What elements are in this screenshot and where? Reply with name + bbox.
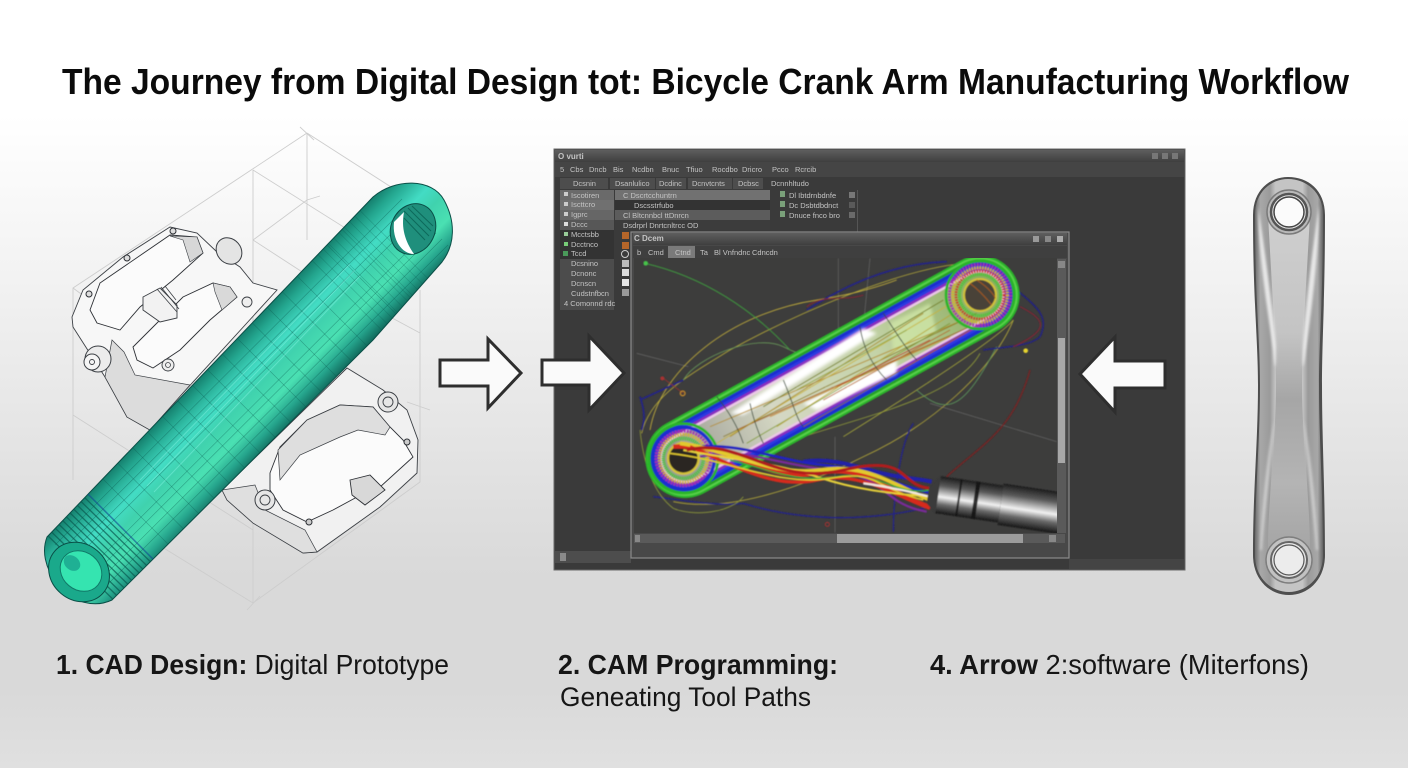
inner title bar: C Dcem — [634, 234, 664, 243]
left tree panel: Dcsnino — [571, 259, 598, 268]
menu bar: Cbs — [570, 165, 584, 174]
left tree panel: Cudstnfbcn — [571, 289, 609, 298]
menu bar: Dncb — [589, 165, 607, 174]
inner horizontal scrollbar — [634, 534, 1065, 543]
twisted toolpath bundle — [670, 443, 932, 512]
left tree panel: Iscttcro — [571, 200, 595, 209]
green crank cylinder mesh — [36, 183, 452, 614]
upper boss rings — [946, 261, 1014, 329]
middle list panel — [615, 190, 770, 296]
middle list panel: C Dscrtcchuntrn — [623, 191, 677, 200]
menu bar: Rcrcib — [795, 165, 816, 174]
inner tabs: Ctnd — [675, 248, 691, 257]
crank edge highlights — [1258, 205, 1319, 550]
left tree panel: Tccd — [571, 249, 586, 258]
caption: step 2 — [558, 649, 838, 712]
title bar — [555, 150, 1184, 162]
menu bar: 5 — [560, 165, 564, 174]
caption: step 1: 1. CAD Design: Digital Prototype — [56, 649, 449, 680]
toolbar tabs: Dcsnin — [573, 179, 596, 188]
inner title bar — [633, 233, 1067, 245]
menu bar: Ncdbn — [632, 165, 654, 174]
left tree panel: Dcnonc — [571, 269, 597, 278]
menu bar: Rocdbo — [712, 165, 738, 174]
arrow: CAD to CAM — [440, 339, 521, 408]
outer status bar — [555, 551, 1184, 569]
menu bar: Pcco — [772, 165, 789, 174]
toolbar tabs: Dcbsc — [738, 179, 759, 188]
menu bar — [555, 162, 1184, 177]
menu bar: Dricro — [742, 165, 762, 174]
right options panel: Dc Dsbtdbdnct — [789, 201, 839, 210]
inner tabs: b — [637, 248, 641, 257]
toolpath drawing — [637, 258, 1080, 536]
caption: step 4: 4. Arrow 2:software (Miterfons) — [930, 649, 1309, 680]
toolpath canvas background — [634, 258, 1057, 533]
toolbar tabs: Dcnvtcnts — [692, 179, 725, 188]
inner tabs: Cmd — [648, 248, 664, 257]
title bar: O vurti — [558, 152, 584, 161]
panel: finished crank arm — [1253, 177, 1325, 595]
cutting tool — [926, 476, 1057, 533]
inner toolpath strands — [710, 300, 977, 443]
inner vertical scrollbar — [1057, 259, 1066, 533]
left tree panel: Igprc — [571, 210, 588, 219]
right options panel: Dnuce fnco bro — [789, 211, 840, 220]
crank highlight streaks — [730, 303, 937, 415]
left tree panel: Dcnscn — [571, 279, 596, 288]
lower pedal wireframe — [222, 368, 418, 553]
middle list panel: Dsdrprl Dnrtcnltrcc OD — [623, 221, 699, 230]
toolpath markers — [643, 261, 1028, 526]
menu bar: Tfiuo — [686, 165, 703, 174]
outer toolpath loops — [640, 262, 1043, 532]
left tree panel: Dccc — [571, 220, 588, 229]
caption: step 2: 2. CAM Programming: — [558, 649, 838, 680]
caption: step 2: Geneating Tool Paths — [560, 682, 811, 712]
inner tabs: Cdncdn — [752, 248, 778, 257]
crank top end bore — [382, 196, 444, 262]
right options panel: Dl Ibtdrnbdnfe — [789, 191, 836, 200]
arrow: into CAM window — [542, 336, 624, 410]
middle list panel: Dscsstrfubo — [634, 201, 674, 210]
inner tabs: Bl Vnfndnc — [714, 248, 751, 257]
crank centre web — [1268, 215, 1310, 550]
outer window frame — [554, 149, 1185, 570]
crank threaded end bore — [36, 530, 122, 614]
menu bar: Bnuc — [662, 165, 679, 174]
left tree panel: Mcctsbb — [571, 230, 599, 239]
left tree panel: 4 Comonnd rdc — [564, 299, 616, 308]
lower boss rings — [649, 424, 718, 493]
left tree panel: Iscotiren — [571, 191, 599, 200]
toolbar tabs: Dsanlulico — [615, 179, 650, 188]
toolbar tabs: Dcnnhltudo — [771, 179, 809, 188]
inner tabs — [633, 246, 1067, 258]
panel: CAM software window — [554, 149, 1185, 570]
left tree panel: Dcctnco — [571, 240, 598, 249]
toolbar tabs — [555, 177, 1184, 190]
crank bottom bore — [1266, 537, 1312, 583]
middle list panel: Cl Bltcnnbcl ttDnrcn — [623, 211, 689, 220]
crank contour bands — [685, 295, 980, 458]
inner tabs: Ta — [700, 248, 709, 257]
right options panel — [780, 190, 858, 234]
menu bar: Bis — [613, 165, 624, 174]
grid reference lines — [637, 258, 1057, 533]
upper pedal wireframe — [72, 227, 277, 430]
title: The Journey from Digital Design tot: Bicycle Crank Arm Manufacturing Workflow — [62, 61, 1350, 102]
inner toolpath window — [631, 232, 1080, 558]
construction wireframe box — [73, 127, 430, 610]
crank top bore — [1267, 190, 1311, 234]
arrow: from finished part — [1080, 337, 1165, 412]
panel: CAD design illustration — [36, 127, 452, 614]
toolbar tabs: Dcdinc — [659, 179, 682, 188]
left tree panel — [560, 190, 616, 310]
